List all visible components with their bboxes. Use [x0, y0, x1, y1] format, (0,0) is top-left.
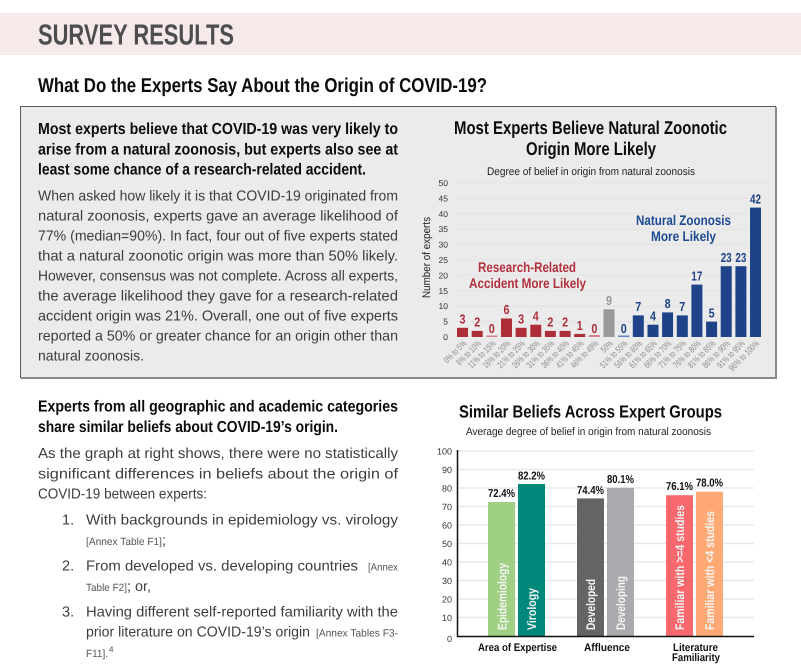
x axis labels: 66% to 70%: [642, 338, 674, 370]
value labels: 7: [679, 299, 685, 314]
value labels: 0: [591, 321, 597, 336]
lower left heading: Experts from all geographic and academic categories: [38, 399, 398, 416]
list item 1: [Annex Table F1]: [86, 536, 162, 548]
y axis labels: 90: [442, 465, 452, 475]
value labels: [460, 192, 761, 336]
list item 2: ; or,: [127, 579, 151, 595]
y axis labels: 5: [443, 317, 448, 327]
value labels: 23: [721, 250, 732, 265]
list item 3: Having different self-reported familiarity with the: [86, 604, 398, 620]
list item 2: [Annex: [368, 562, 399, 574]
value labels: 5: [709, 306, 715, 320]
bars: [488, 484, 723, 636]
panel body text: that a natural zoonotic origin was more than 50% likely.: [38, 249, 398, 265]
lower left intro text: [38, 446, 399, 502]
y axis labels: 40: [442, 558, 452, 568]
list item 3: [Annex Tables F3-: [316, 628, 398, 640]
chart subtitle: expert groups: Average degree of belief in origin from natural zoonosis: [466, 426, 711, 438]
x axis labels: 51% to 55%: [598, 338, 630, 370]
x axis labels: 26% to 30%: [510, 338, 542, 370]
value labels: 1: [577, 318, 583, 333]
numbered list: [62, 512, 399, 660]
y axis labels: 45: [439, 193, 448, 203]
lower left heading: share similar beliefs about COVID-19’s origin.: [38, 419, 338, 436]
y axis labels: 0: [443, 332, 448, 342]
list item 3: prior literature on COVID-19’s origin: [86, 624, 310, 640]
bar chart: degree of belief: [421, 178, 767, 373]
x axis labels: 50%: [599, 338, 615, 355]
panel body text: natural zoonosis.: [38, 349, 144, 365]
list item 1: 1.: [62, 512, 74, 528]
value labels: 2: [474, 314, 480, 330]
lower left intro text: As the graph at right shows, there were no statistically: [38, 446, 399, 462]
value labels: 9: [606, 293, 612, 308]
value labels: 7: [635, 299, 641, 314]
lower left intro text: COVID-19 between experts:: [38, 486, 207, 502]
y axis labels: 50: [442, 539, 452, 549]
chart title: [454, 117, 727, 159]
y axis labels: 30: [442, 576, 452, 586]
panel heading text: [38, 121, 399, 178]
y axis labels: 80: [442, 484, 452, 494]
x axis labels: 61% to 65%: [627, 338, 659, 370]
x axis labels: 81% to 85%: [686, 338, 718, 370]
value labels: 0: [621, 321, 627, 336]
category labels: Familiarity: [672, 652, 721, 664]
x axis labels: 16% to 20%: [481, 338, 512, 370]
value labels: 2: [562, 314, 568, 330]
chart title: expert groups: Similar Beliefs Across Expert Groups: [459, 402, 722, 422]
y axis labels: 70: [442, 502, 452, 512]
x axis labels: 11% to 15%: [466, 338, 498, 370]
y axis labels: [437, 446, 452, 644]
x axis labels: 41% to 45%: [554, 338, 586, 370]
lower left heading: [38, 399, 398, 436]
value labels: 3: [518, 312, 524, 326]
percentage labels: 76.1%: [666, 481, 693, 493]
chart subtitle: Degree of belief in origin from natural zoonosis: [487, 166, 695, 178]
section heading: What Do the Experts Say About the Origin of COVID-19?: [38, 75, 487, 97]
category labels: Affluence: [584, 642, 630, 654]
list item 3: 4: [109, 645, 114, 654]
x axis labels: 31% to 35%: [524, 338, 556, 370]
list item 1: ;: [162, 533, 166, 549]
y axis labels: [439, 178, 448, 342]
panel: natural zoonosis findings: [20, 106, 776, 378]
panel body text: However, consensus was not complete. Across all experts,: [38, 269, 398, 285]
panel body text: the average likelihood they gave for a research-related: [38, 289, 398, 305]
in-bar labels: Familiar with >=4 studies: [673, 505, 687, 630]
list item 2: Table F2]: [86, 582, 127, 594]
list item 3: [62, 604, 398, 660]
y axis labels: 35: [439, 224, 448, 234]
panel body text: accident origin was 21%. Overall, one out of five experts: [38, 309, 398, 325]
x axis labels: 56% to 60%: [612, 338, 644, 370]
callout: research-related accident more likely: Research-Related: [478, 259, 576, 275]
in-bar labels: Developed: [584, 579, 598, 630]
list item 3: F11].: [86, 648, 108, 660]
value labels: 2: [547, 314, 553, 330]
percentage labels: 78.0%: [696, 478, 723, 490]
panel body text: When asked how likely it is that COVID-19 originated from: [38, 189, 398, 205]
header band: [0, 13, 801, 55]
category labels: Literature: [673, 642, 718, 654]
y axis labels: 100: [437, 446, 452, 456]
title: SURVEY RESULTS: [38, 20, 234, 52]
axes: [458, 450, 754, 636]
y axis labels: 30: [439, 240, 448, 250]
panel heading text: least some chance of a research-related accident.: [38, 162, 366, 178]
panel heading text: Most experts believe that COVID-19 was very likely to: [38, 121, 398, 138]
value labels: 23: [735, 250, 746, 265]
x axis labels: 0% to 5%: [442, 338, 468, 365]
y axis labels: 50: [439, 178, 448, 188]
panel body text: natural zoonosis, experts gave an average likelihood of: [38, 209, 399, 225]
callout: natural zoonosis more likely: Natural Zoonosis: [636, 212, 731, 228]
y axis labels: 40: [439, 209, 448, 219]
y axis labels: 0: [447, 634, 452, 644]
value labels: 4: [650, 308, 657, 324]
percentage labels: 80.1%: [607, 474, 634, 486]
in-bar labels: Familiar with <4 studies: [703, 511, 717, 630]
callout: research-related accident more likely: [469, 259, 586, 291]
percentage labels: 82.2%: [518, 470, 545, 482]
value labels: 0: [489, 321, 495, 336]
x axis labels: 86% to 90%: [700, 338, 732, 370]
value labels: 3: [460, 312, 466, 326]
x axis labels: 36% to 40%: [539, 338, 571, 370]
percentage labels: 74.4%: [577, 485, 604, 497]
list item 3: 3.: [62, 604, 74, 620]
list item 2: [62, 558, 399, 595]
in-bar labels: Epidemiology: [496, 563, 510, 630]
value labels: 6: [504, 302, 510, 317]
value labels: 8: [665, 296, 671, 311]
x axis labels: 71% to 75%: [656, 338, 688, 370]
list item 2: 2.: [62, 558, 74, 574]
panel heading text: arise from a natural zoonosis, but experts also see at: [38, 142, 399, 158]
y axis labels: 25: [439, 255, 448, 265]
x axis labels: 96% to 100%: [727, 338, 761, 373]
callout: natural zoonosis more likely: More Likely: [651, 228, 716, 244]
value labels: 4: [533, 308, 539, 324]
x axis labels: 91% to 95%: [715, 338, 747, 370]
x axis labels: 21% to 25%: [495, 338, 527, 370]
y axis labels: 10: [442, 613, 452, 623]
y axis labels: 20: [442, 594, 452, 604]
percentage labels: [488, 470, 723, 500]
panel body text: 77% (median=90%). In fact, four out of five experts stated: [38, 229, 398, 245]
x axis labels: 6% to 10%: [454, 338, 483, 367]
list item 1: [62, 512, 399, 549]
y axis labels: 10: [439, 301, 448, 311]
chart title: Most Experts Believe Natural Zoonotic: [454, 117, 727, 138]
x axis labels: 76% to 80%: [671, 338, 703, 370]
x axis labels: [442, 338, 761, 373]
category labels: Area of Expertise: [478, 642, 557, 654]
panel body text: reported a 50% or greater chance for an origin other than: [38, 329, 398, 345]
value labels: 42: [750, 192, 761, 206]
value labels: 17: [691, 268, 702, 284]
in-bar labels: Virology: [525, 588, 539, 630]
list item 1: With backgrounds in epidemiology vs. virology: [86, 512, 399, 528]
panel body text: [38, 189, 399, 365]
bar chart: expert groups: [437, 446, 754, 664]
y axis labels: 15: [439, 286, 448, 296]
lower left intro text: significant differences in beliefs about the origin of: [38, 466, 399, 482]
callout: natural zoonosis more likely: [636, 212, 731, 244]
y axis title: Number of experts: [421, 217, 433, 298]
callout: research-related accident more likely: Accident More Likely: [469, 275, 586, 291]
x axis labels: 46% to 49%: [568, 338, 600, 370]
in-bar labels: Developing: [614, 576, 628, 630]
bars: [457, 208, 761, 337]
percentage labels: 72.4%: [488, 488, 515, 500]
category labels: [478, 642, 721, 664]
y axis labels: 60: [442, 520, 452, 530]
list item 2: From developed vs. developing countries: [86, 558, 358, 574]
in-bar labels: [496, 505, 717, 630]
y axis labels: 20: [439, 270, 448, 280]
chart title: Origin More Likely: [526, 138, 657, 159]
